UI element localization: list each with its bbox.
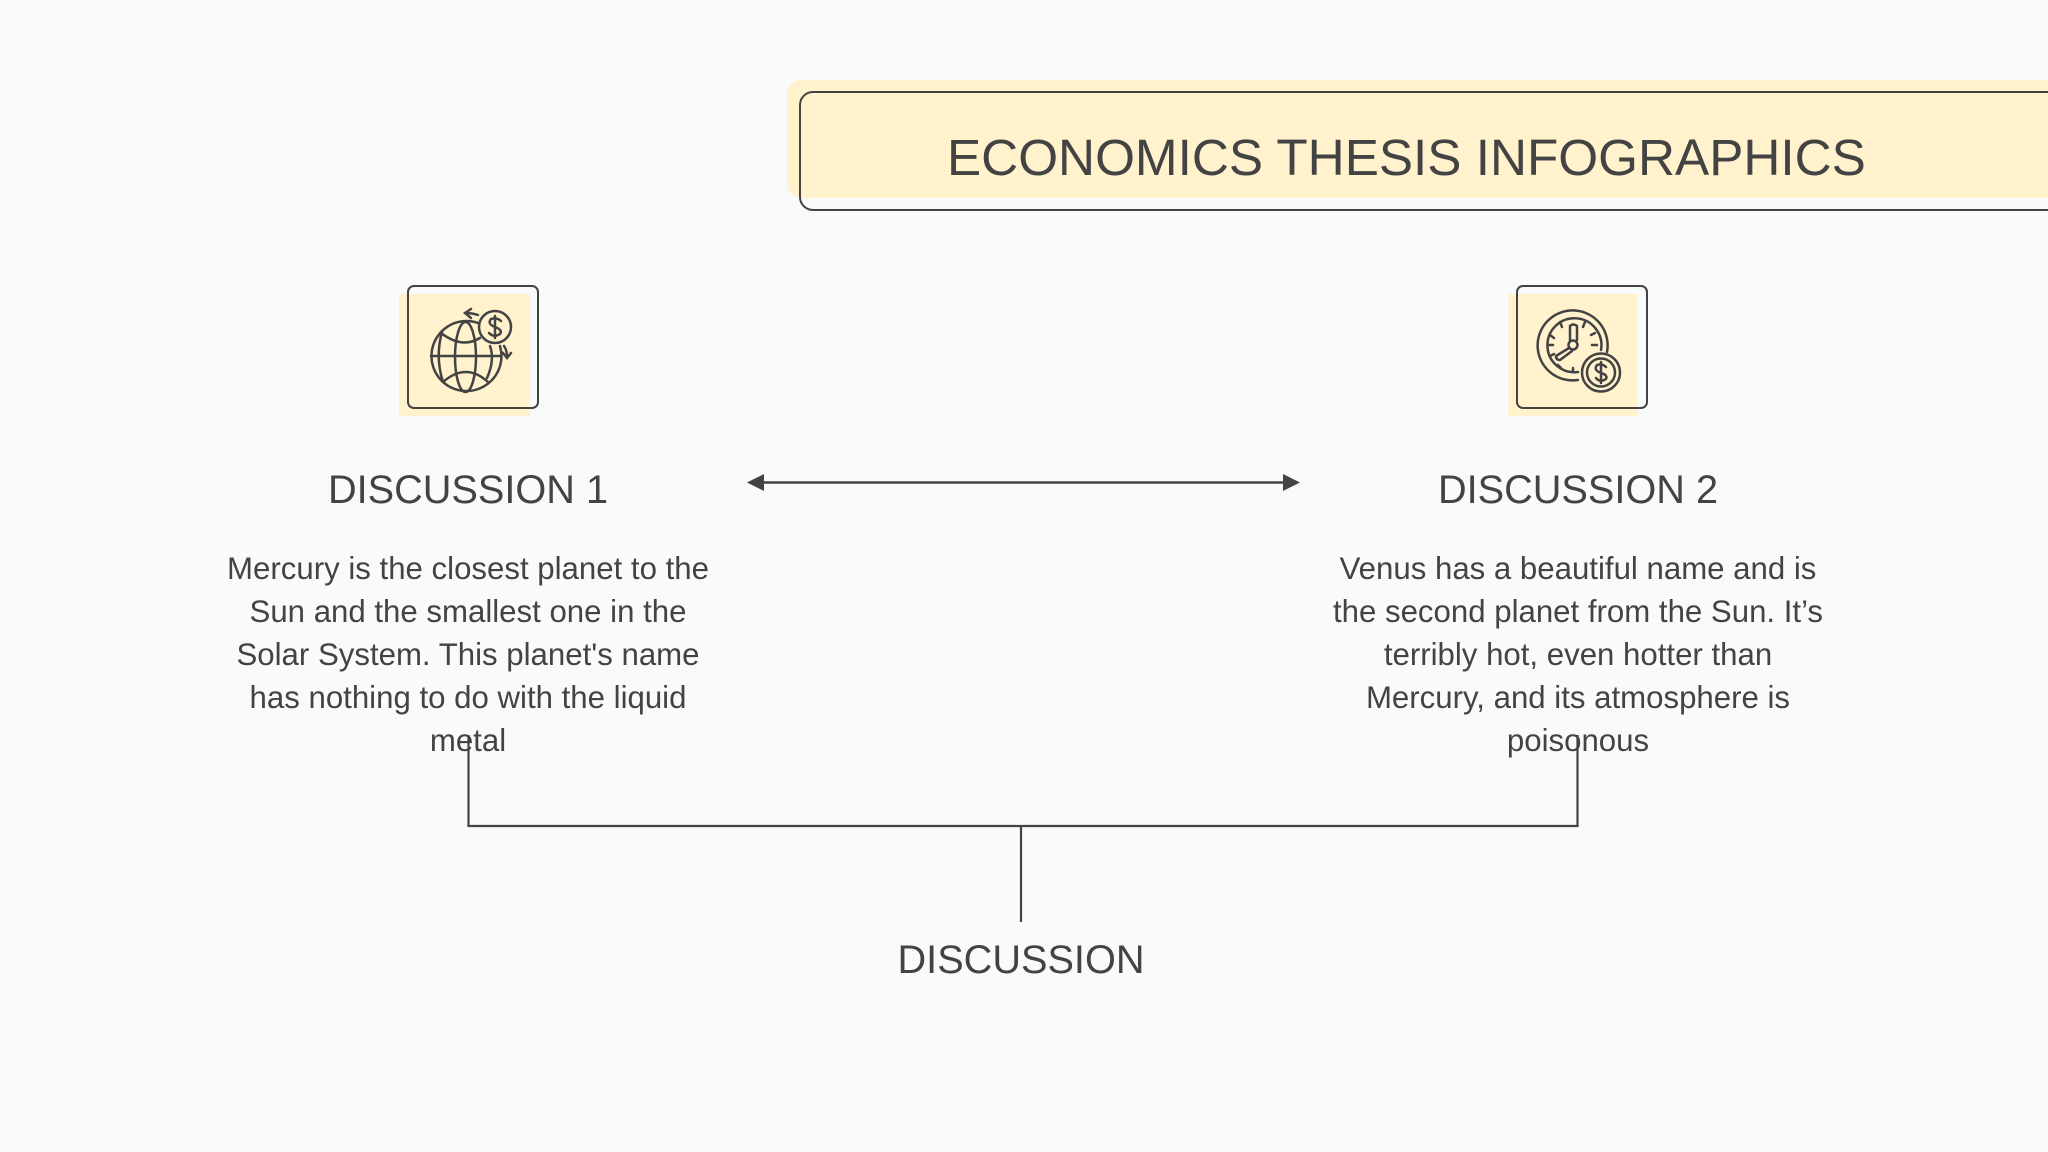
heading: discussion: DISCUSSION: [898, 938, 1144, 982]
banner outline: [799, 91, 2048, 211]
icon tile: globe with dollar: [399, 285, 539, 416]
body text: discussion 1: [227, 551, 709, 758]
banner yellow fill: [787, 80, 2048, 198]
body text: discussion 2: terribly hot, even hotter than: [1384, 637, 1772, 672]
title banner: [787, 80, 2048, 211]
icon tile: clock with dollar: [1508, 285, 1648, 416]
body text: discussion 1: Sun and the smallest one in the: [250, 594, 686, 629]
bracket connector: [467, 735, 1579, 922]
heading: discussion 2: DISCUSSION 2: [1438, 468, 1718, 512]
title: ECONOMICS THESIS INFOGRAPHICS: [947, 129, 1866, 186]
double-headed arrow: [747, 474, 1300, 491]
body text: discussion 1: Mercury is the closest planet to the: [227, 551, 709, 586]
body text: discussion 2: Mercury, and its atmosphere is: [1366, 680, 1790, 715]
tile outline: [1516, 285, 1648, 409]
heading: discussion 1: DISCUSSION 1: [328, 468, 608, 512]
tile yellow fill: [1508, 294, 1638, 416]
tile outline: [406, 285, 538, 409]
body text: discussion 2: [1333, 551, 1823, 758]
body text: discussion 1: has nothing to do with the liquid: [250, 680, 686, 715]
icon: clock and coin: [1536, 309, 1622, 393]
body text: discussion 1: metal: [430, 723, 506, 758]
body text: discussion 2: the second planet from the Sun. It’s: [1333, 594, 1823, 629]
body text: discussion 1: Solar System. This planet's name: [236, 637, 700, 672]
tile yellow fill: [399, 294, 530, 416]
body text: discussion 2: Venus has a beautiful name and is: [1340, 551, 1816, 586]
body text: discussion 2: poisonous: [1507, 723, 1649, 758]
icon: globe and coin: [430, 308, 512, 394]
